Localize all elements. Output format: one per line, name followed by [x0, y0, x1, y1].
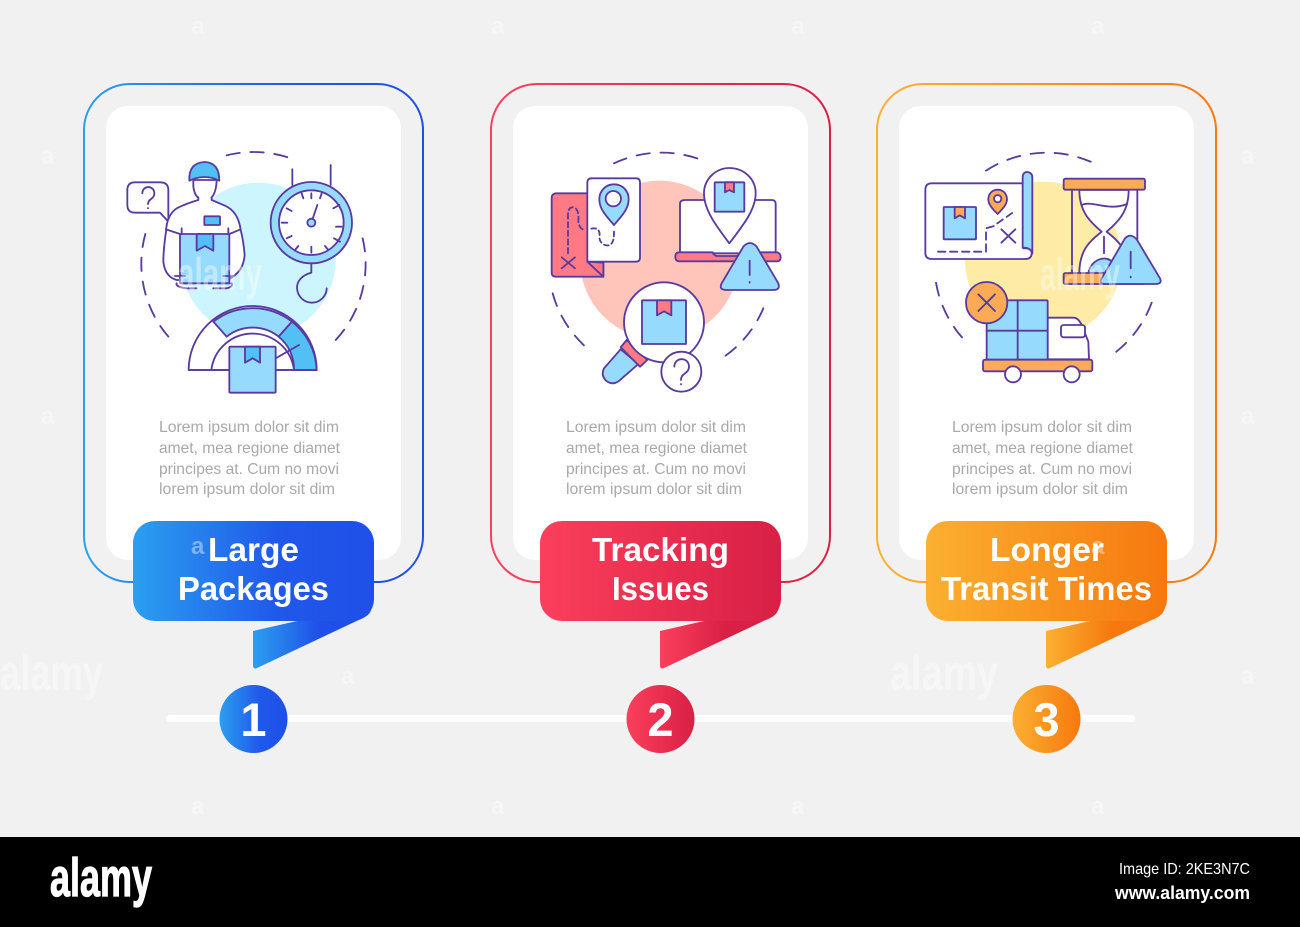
watermarks: a — [491, 793, 505, 820]
text block 2: Lorem ipsum dolor sit dim — [566, 419, 746, 436]
text block 2 — [566, 419, 748, 498]
ribbon label 2: Tracking — [592, 531, 729, 568]
watermarks: a — [1091, 13, 1105, 40]
text block 2: lorem ipsum dolor sit dim — [566, 481, 742, 498]
text block 3: Lorem ipsum dolor sit dim — [952, 419, 1132, 436]
ribbon label 1 — [133, 521, 374, 669]
ribbon label 1: Packages — [178, 570, 329, 607]
watermarks: a — [1241, 143, 1255, 170]
card body 1 — [106, 106, 401, 560]
watermarks: a — [1091, 533, 1105, 560]
watermarks: a — [191, 13, 205, 40]
watermarks: alamy — [1040, 248, 1120, 300]
ribbon label 3 — [926, 521, 1167, 669]
image id: Image ID: 2KE3N7C — [1119, 861, 1250, 878]
watermarks: a — [41, 403, 55, 430]
text block 1 — [159, 419, 341, 498]
card outline 2 — [491, 84, 830, 582]
card outline 3 — [877, 84, 1216, 582]
step marker 1: 1 — [240, 693, 267, 746]
website: www.alamy.com — [1114, 883, 1250, 903]
ribbon label 3: Transit Times — [941, 570, 1152, 607]
watermarks: a — [341, 663, 355, 690]
watermarks: alamy — [0, 645, 103, 701]
ribbon label 1: Large — [208, 531, 299, 568]
watermarks: a — [1241, 403, 1255, 430]
text block 3: lorem ipsum dolor sit dim — [952, 481, 1128, 498]
watermarks: a — [791, 793, 805, 820]
text block 1: principes at. Cum no movi — [159, 461, 339, 478]
ribbon label 3: Longer — [990, 531, 1104, 568]
text block 3: amet, mea regione diamet — [952, 440, 1134, 457]
watermarks: a — [791, 13, 805, 40]
text block 1: Lorem ipsum dolor sit dim — [159, 419, 339, 436]
step marker 3: 3 — [1033, 693, 1060, 746]
icon: courier, scale and gauge — [127, 152, 366, 393]
footer logo: alamy — [50, 848, 152, 908]
ribbon label 2 — [540, 521, 781, 669]
watermarks: a — [1091, 793, 1105, 820]
watermarks: alamy — [890, 645, 998, 701]
watermarks: alamy — [178, 248, 262, 300]
watermarks: a — [1241, 663, 1255, 690]
icon: map, laptop, magnifier — [552, 153, 781, 392]
timeline line — [166, 715, 1135, 722]
text block 3: principes at. Cum no movi — [952, 461, 1132, 478]
panel: longer transit times — [877, 84, 1216, 669]
text block 1: amet, mea regione diamet — [159, 440, 341, 457]
card outline 1 — [84, 84, 423, 582]
footer band — [0, 837, 1300, 927]
ribbon label 2: Issues — [612, 570, 709, 607]
card body 2 — [513, 106, 808, 560]
card body 3 — [899, 106, 1194, 560]
text block 1: lorem ipsum dolor sit dim — [159, 481, 335, 498]
watermarks: a — [41, 143, 55, 170]
step marker 2: 2 — [647, 693, 674, 746]
icon: route map, hourglass, truck — [925, 153, 1161, 382]
watermarks: a — [191, 533, 205, 560]
text block 2: amet, mea regione diamet — [566, 440, 748, 457]
text block 2: principes at. Cum no movi — [566, 461, 746, 478]
panel: tracking issues — [491, 84, 830, 669]
watermarks: a — [491, 13, 505, 40]
step marker 2 — [626, 685, 694, 753]
step marker 3 — [1012, 685, 1080, 753]
step marker 1 — [220, 685, 288, 753]
panel: large packages — [84, 84, 423, 669]
text block 3 — [952, 419, 1134, 498]
watermarks: a — [191, 793, 205, 820]
